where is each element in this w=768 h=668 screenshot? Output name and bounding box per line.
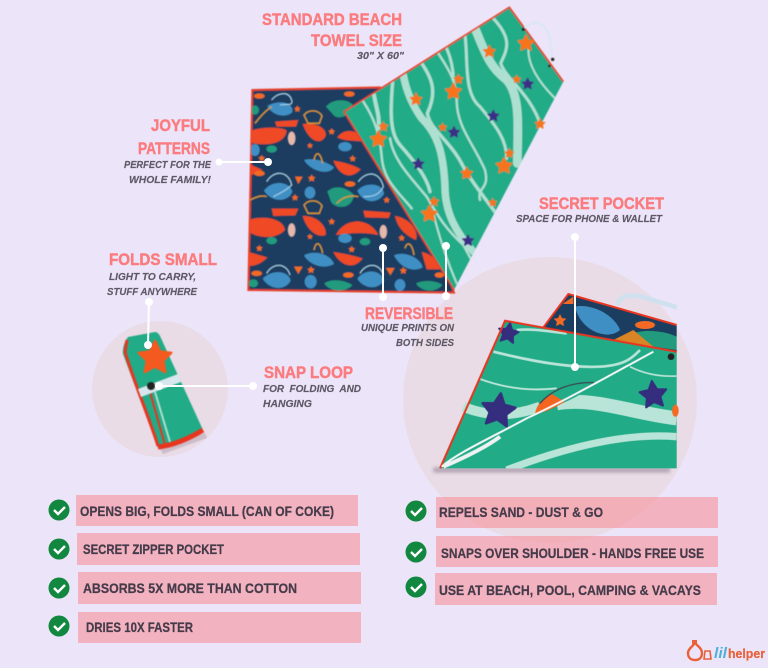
roll snap <box>147 382 155 390</box>
green front side <box>440 321 679 470</box>
back navy side <box>543 294 677 352</box>
roll seam <box>150 392 165 445</box>
line: reversible navy <box>379 244 387 301</box>
navy mermaid print side <box>248 87 454 293</box>
illustration: open towel with two prints <box>248 7 563 293</box>
feature: opens big: OPENS BIG, FOLDS SMALL (CAN OF COKE) <box>80 503 334 519</box>
feature: opens big <box>48 495 358 526</box>
heading: snap loop: SNAP LOOP <box>264 364 353 382</box>
circle behind pocket close-up <box>403 257 697 543</box>
heading: joyful patterns: PATTERNS <box>138 140 210 158</box>
roll band <box>138 374 181 397</box>
line: folds small <box>144 298 153 349</box>
feature: repels sand: REPELS SAND - DUST & GO <box>439 504 603 520</box>
heading: reversible: UNIQUE PRINTS ON <box>361 323 455 334</box>
illustration: rolled towel <box>123 332 207 454</box>
feature: dries faster <box>48 612 361 643</box>
heading: folds small: FOLDS SMALL <box>109 251 217 269</box>
roll red edge <box>125 340 158 446</box>
logo: lil helper: helper <box>728 646 765 661</box>
heading: reversible <box>361 305 455 349</box>
green wave print side <box>344 7 563 290</box>
feature: repels sand <box>406 497 718 528</box>
feature list: left column <box>48 495 361 643</box>
line: snap loop <box>155 382 257 390</box>
feature: snaps over shoulder <box>406 536 718 567</box>
heading: standard beach towel size: TOWEL SIZE <box>311 32 402 50</box>
heading: snap loop <box>263 364 361 410</box>
heading: snap loop: HANGING <box>263 399 312 410</box>
roll body <box>123 332 203 448</box>
navy stars <box>413 78 533 246</box>
heading: joyful patterns: WHOLE FAMILY! <box>129 175 212 186</box>
callout lines <box>144 158 579 390</box>
heading: snap loop: FOR FOLDING AND <box>263 384 361 395</box>
heading: folds small: LIGHT TO CARRY, <box>109 272 196 283</box>
illustration: pocket close-up <box>433 294 679 473</box>
shadow <box>433 467 670 473</box>
feature: zipper pocket <box>48 533 360 565</box>
feature: use at beach <box>406 573 717 605</box>
feature: absorbs: ABSORBS 5X MORE THAN COTTON <box>83 580 297 596</box>
roll wave <box>155 392 170 442</box>
line: reversible green <box>442 242 450 300</box>
corner snap loop <box>522 23 554 67</box>
feature list: right column <box>406 497 718 605</box>
heading: secret pocket: SECRET POCKET <box>539 195 664 213</box>
roll shadow <box>160 433 207 454</box>
logo: lil helper <box>688 640 765 662</box>
line: joyful patterns <box>216 158 272 166</box>
feature: dries faster: DRIES 10X FASTER <box>86 619 193 635</box>
roll hem <box>158 430 203 447</box>
carry loop <box>617 296 677 307</box>
feature: snaps over shoulder: SNAPS OVER SHOULDER - HANDS FREE USE <box>441 545 704 561</box>
heading: secret pocket <box>516 195 664 225</box>
heading: folds small <box>107 251 217 298</box>
heading: joyful patterns: JOYFUL <box>151 117 210 135</box>
feature: absorbs <box>48 572 361 604</box>
feature: zipper pocket: SECRET ZIPPER POCKET <box>83 541 224 557</box>
heading: reversible: BOTH SIDES <box>396 338 454 349</box>
feature: use at beach: USE AT BEACH, POOL, CAMPING & VACAYS <box>439 582 701 598</box>
logo: lil helper: lil <box>714 645 728 662</box>
line: secret pocket <box>571 233 579 371</box>
heading: standard beach towel size: 30" X 60" <box>357 51 404 62</box>
circle behind rolled towel <box>92 321 228 457</box>
heading: secret pocket: SPACE FOR PHONE & WALLET <box>516 214 663 225</box>
heading: joyful patterns <box>124 117 212 186</box>
heading: standard beach towel size <box>262 11 404 62</box>
zipper pocket opening <box>442 352 653 467</box>
heading: joyful patterns: PERFECT FOR THE <box>124 160 211 171</box>
roll star <box>139 341 171 372</box>
orange stars <box>370 35 545 221</box>
heading: folds small: STUFF ANYWHERE <box>107 287 197 298</box>
heading: standard beach towel size: STANDARD BEACH <box>262 11 402 29</box>
heading: reversible: REVERSIBLE <box>365 305 453 323</box>
